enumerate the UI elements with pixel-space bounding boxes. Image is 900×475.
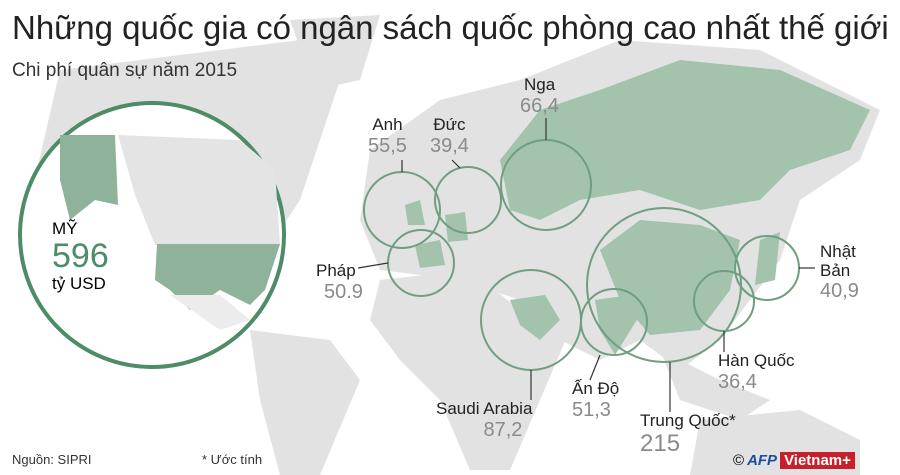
label Trung Quoc: Trung Quốc* xyxy=(640,411,736,430)
label Saudi: Saudi Arabia xyxy=(436,399,532,418)
label Han Quoc xyxy=(718,351,795,393)
North America xyxy=(30,40,340,360)
India xyxy=(595,295,640,355)
logo: AFP xyxy=(747,452,777,469)
note: * Ước tính xyxy=(202,452,262,467)
label Anh: 55,5 xyxy=(368,135,407,157)
title: Những quốc gia có ngân sách quốc phòng cao nhất thế giới xyxy=(12,9,889,46)
Australia xyxy=(690,410,860,475)
Saudi xyxy=(510,295,560,340)
US label: 596 xyxy=(52,237,109,275)
China highlight xyxy=(600,220,740,335)
label Nhat Ban: Bản xyxy=(820,261,850,280)
label Anh xyxy=(368,115,407,157)
label Duc xyxy=(430,115,469,157)
US label: tỷ USD xyxy=(52,274,106,293)
label Phap: 50.9 xyxy=(324,281,363,303)
Europe small highlights xyxy=(405,200,780,292)
label An Do: Ấn Độ xyxy=(572,379,619,398)
subtitle: Chi phí quân sự năm 2015 xyxy=(12,60,237,81)
label Nga: 66,4 xyxy=(520,95,559,117)
source: Nguồn: SIPRI xyxy=(12,452,92,467)
label Han Quoc: Hàn Quốc xyxy=(718,351,795,370)
label Nhat Ban xyxy=(820,242,859,302)
logo: Vietnam+ xyxy=(784,452,851,469)
US label xyxy=(52,219,109,293)
label Nga xyxy=(520,75,559,117)
label An Do: 51,3 xyxy=(572,399,611,421)
label Phap: Pháp xyxy=(316,261,356,280)
label Anh: Anh xyxy=(372,115,403,134)
label Saudi xyxy=(436,399,532,441)
label An Do xyxy=(572,379,619,421)
US label: MỸ xyxy=(52,219,78,238)
label Phap xyxy=(316,261,363,303)
label Nhat Ban: Nhật xyxy=(820,242,856,261)
label Nga: Nga xyxy=(524,75,555,94)
label Duc: Đức xyxy=(433,115,466,134)
Africa xyxy=(370,270,570,470)
label Trung Quoc: 215 xyxy=(640,430,680,457)
Russia highlight xyxy=(500,60,870,220)
label Duc: 39,4 xyxy=(430,135,469,157)
label Saudi: 87,2 xyxy=(483,419,522,441)
label Han Quoc: 36,4 xyxy=(718,371,757,393)
logo: © xyxy=(733,452,744,469)
SE Asia / Indonesia xyxy=(660,350,770,420)
Europe / Asia xyxy=(360,40,880,370)
label Trung Quoc xyxy=(640,411,736,457)
US circle xyxy=(20,103,284,367)
label Nhat Ban: 40,9 xyxy=(820,280,859,302)
Greenland xyxy=(290,15,380,90)
South America xyxy=(250,330,360,475)
logo xyxy=(733,452,855,469)
